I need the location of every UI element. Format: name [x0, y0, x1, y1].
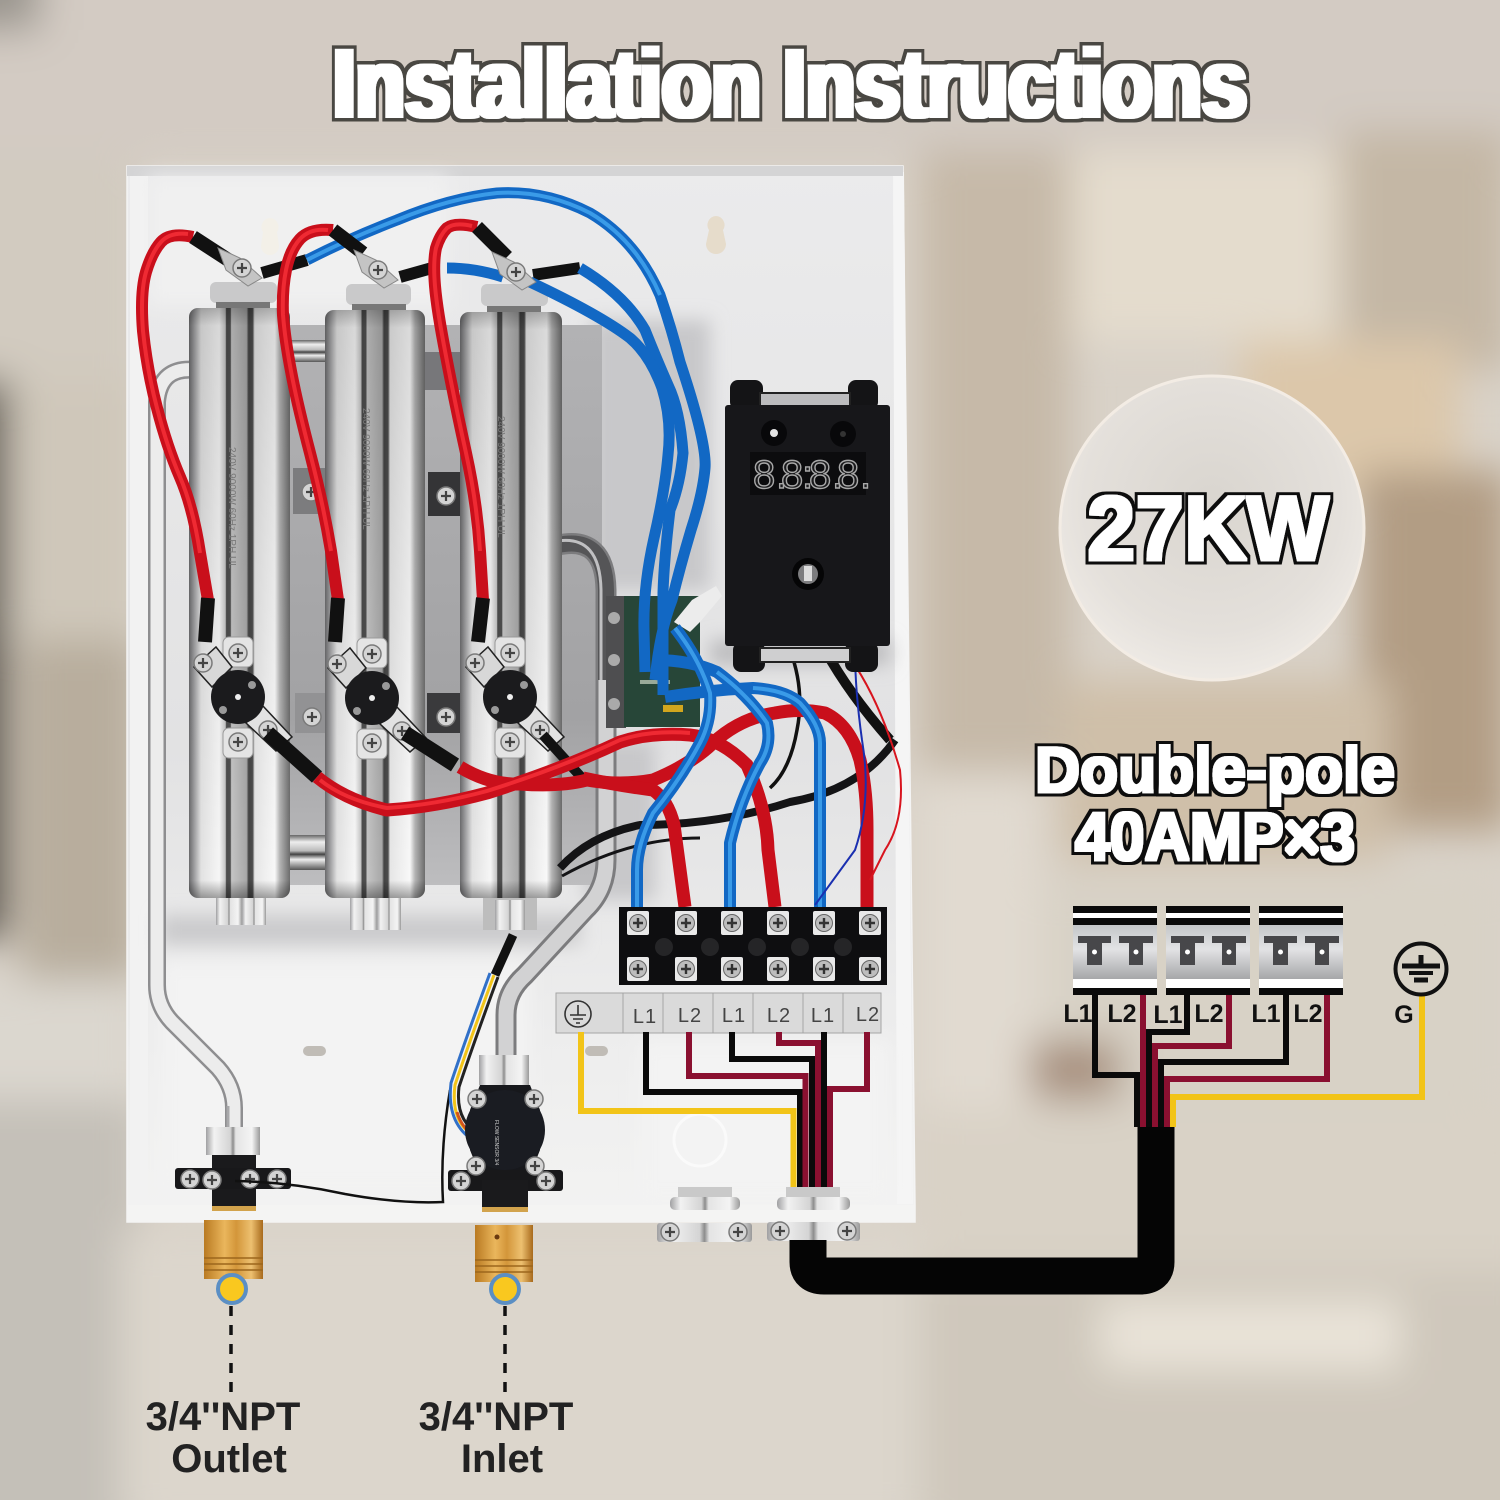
heating cylinder 2: 240V 9000W 60Hz 1PH UL	[360, 408, 371, 530]
title: Installation Instructions	[333, 29, 1247, 138]
inlet marker dot and dashed leader	[491, 1275, 519, 1396]
black power cable	[808, 1127, 1156, 1276]
thin sensor cable	[235, 1090, 450, 1202]
terminal label strip: L2	[678, 1005, 702, 1027]
breaker labels: L2	[1194, 1000, 1224, 1028]
grey back plate	[282, 325, 602, 885]
thermostat assembly 2	[328, 638, 426, 759]
breaker labels: G	[1394, 1001, 1414, 1029]
inlet label: 3/4''NPT	[419, 1395, 573, 1439]
breaker labels: L1	[1063, 1000, 1093, 1028]
red heater wires	[142, 224, 507, 642]
red lower wires	[268, 710, 867, 907]
breaker labels: L1	[1153, 1001, 1183, 1029]
bottom flange	[127, 1205, 915, 1222]
27KW badge: 27KW	[1087, 478, 1329, 580]
outlet fitting	[175, 1127, 291, 1211]
terminal label strip: L2	[856, 1004, 880, 1026]
strip ground symbol	[565, 1001, 591, 1027]
outlet pipe	[157, 370, 234, 1130]
breaker spec label	[1035, 734, 1395, 875]
breaker spec label: 40AMP×3	[1075, 799, 1355, 875]
thermostat assembly 1	[194, 637, 292, 758]
breaker labels	[1063, 1000, 1414, 1029]
mounting ears	[730, 380, 878, 672]
conduit fitting left	[657, 1187, 752, 1242]
panel: water heater enclosure	[127, 166, 915, 1242]
flow sensor and inlet fitting: FLOW SENSOR 3/4	[493, 1120, 499, 1166]
thin control wires	[815, 650, 901, 905]
terminal block	[619, 907, 887, 985]
thermostat assembly 3	[466, 637, 564, 758]
circuit board	[606, 586, 722, 728]
breaker wiring	[1095, 995, 1422, 1127]
brackets	[293, 468, 464, 733]
terminal label strip: L1	[633, 1006, 657, 1028]
inlet label	[419, 1395, 573, 1481]
outlet label: 3/4''NPT	[146, 1395, 300, 1439]
heating cylinder 3	[460, 284, 562, 898]
inlet label: Inlet	[461, 1437, 543, 1481]
connecting pipes	[287, 340, 465, 870]
breaker 1	[1073, 906, 1157, 995]
outlet marker dot and dashed leader	[218, 1275, 246, 1396]
conduit fitting right	[767, 1187, 860, 1241]
keyholes and slots	[261, 216, 726, 1166]
internal wiring diagram	[581, 1032, 867, 1188]
breaker labels: L2	[1107, 1000, 1137, 1028]
heating cylinder 1	[189, 282, 290, 898]
box body	[725, 405, 890, 646]
heating cylinder 2	[325, 284, 425, 898]
blue upper wires	[262, 193, 705, 695]
terminal label strip	[556, 993, 881, 1033]
breaker spec label: Double-pole	[1035, 734, 1395, 806]
flow sensor and inlet fitting	[448, 935, 563, 1212]
breaker 2	[1166, 906, 1250, 995]
display control box	[725, 380, 890, 672]
breaker 3	[1259, 906, 1343, 995]
inlet pipe	[506, 540, 606, 1060]
breaker labels: L2	[1293, 1000, 1323, 1028]
27KW badge	[1060, 376, 1364, 680]
hex nuts at base	[216, 895, 537, 930]
brass outlet connector	[204, 1220, 263, 1279]
circuit breakers	[1073, 906, 1343, 995]
brass inlet connector	[475, 1225, 533, 1282]
outlet label: Outlet	[171, 1437, 287, 1481]
black signal cables	[560, 650, 895, 876]
terminal label strip: L1	[811, 1005, 835, 1027]
adjustment knob	[792, 558, 824, 590]
blue lower wires	[637, 628, 820, 907]
heating cylinder 3: 240V 9000W 60Hz 1PH UL	[495, 416, 506, 538]
LED display: 8.8:8.8.	[753, 453, 871, 497]
terminal label strip: L1	[722, 1005, 746, 1027]
inner side lips	[127, 166, 913, 1204]
outlet label	[146, 1395, 300, 1481]
panel body	[127, 166, 915, 1222]
terminal lugs top	[218, 248, 536, 290]
heating cylinder 1: 240V 9000W 60Hz 1PH UL	[226, 447, 237, 569]
terminal label strip: L2	[767, 1005, 791, 1027]
breaker labels: L1	[1251, 1000, 1281, 1028]
icon: ground symbol	[1396, 944, 1446, 994]
indicator lamps	[761, 420, 856, 447]
